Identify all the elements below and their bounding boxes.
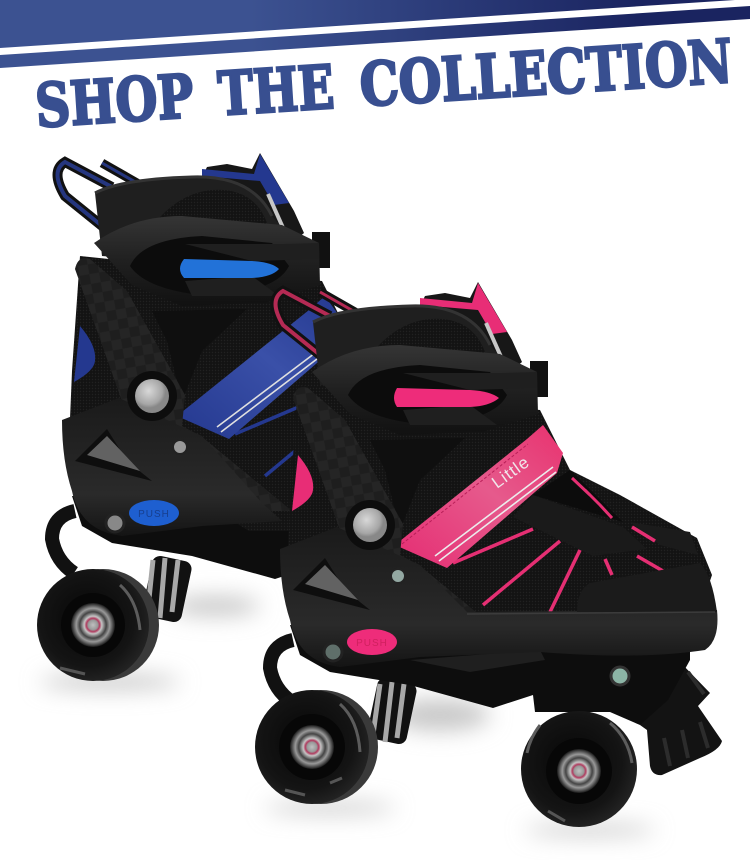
- pink upper cuff: [313, 306, 510, 400]
- pink truck and plate: [270, 625, 690, 725]
- pink cuff ring and buckle: [312, 345, 548, 435]
- title: SHOP: [33, 62, 196, 142]
- pink strap loops: [276, 291, 362, 367]
- pink front wheel: [521, 711, 637, 827]
- pink push button: [347, 629, 397, 655]
- header band: [0, 0, 750, 68]
- skate: blue: [37, 153, 482, 681]
- pink rivets: [324, 500, 629, 685]
- blue carbon arm: [75, 258, 292, 511]
- blue upper cuff: [95, 177, 292, 271]
- blue rear truck and plate: [52, 496, 472, 591]
- pink brake stopper: [640, 662, 722, 775]
- title: [33, 27, 734, 142]
- blue tongue: [199, 153, 304, 251]
- blue push button: [129, 500, 179, 526]
- pink rear wheel: [255, 690, 378, 804]
- blue far wheel: [141, 555, 193, 623]
- pink strap label: Little: [488, 452, 533, 492]
- title: THE: [216, 53, 336, 130]
- pink lacing panel: [513, 470, 647, 556]
- pink carbon arm: [293, 387, 510, 640]
- blue boot: [58, 153, 482, 536]
- pink far wheel: [366, 677, 418, 745]
- blue mesh stripes: [235, 400, 342, 476]
- blue push button: PUSH: [138, 509, 170, 520]
- blue cuff ring: [94, 216, 330, 306]
- skate: pink: [255, 282, 722, 827]
- blue rivets: [106, 371, 187, 532]
- pink push button: PUSH: [356, 638, 388, 649]
- pink mesh stripes: [453, 527, 663, 612]
- blue wheel: [37, 569, 159, 681]
- pink strap: [395, 425, 563, 568]
- blue shell: [62, 398, 282, 536]
- pink boot body and mesh: [288, 385, 712, 615]
- blue strap: [177, 296, 345, 439]
- blue strap loops: [58, 162, 144, 238]
- pink shell and toe cap: [280, 527, 718, 667]
- pink tongue: [417, 282, 522, 380]
- blue boot body: [70, 256, 482, 531]
- floor shadows: [40, 596, 655, 836]
